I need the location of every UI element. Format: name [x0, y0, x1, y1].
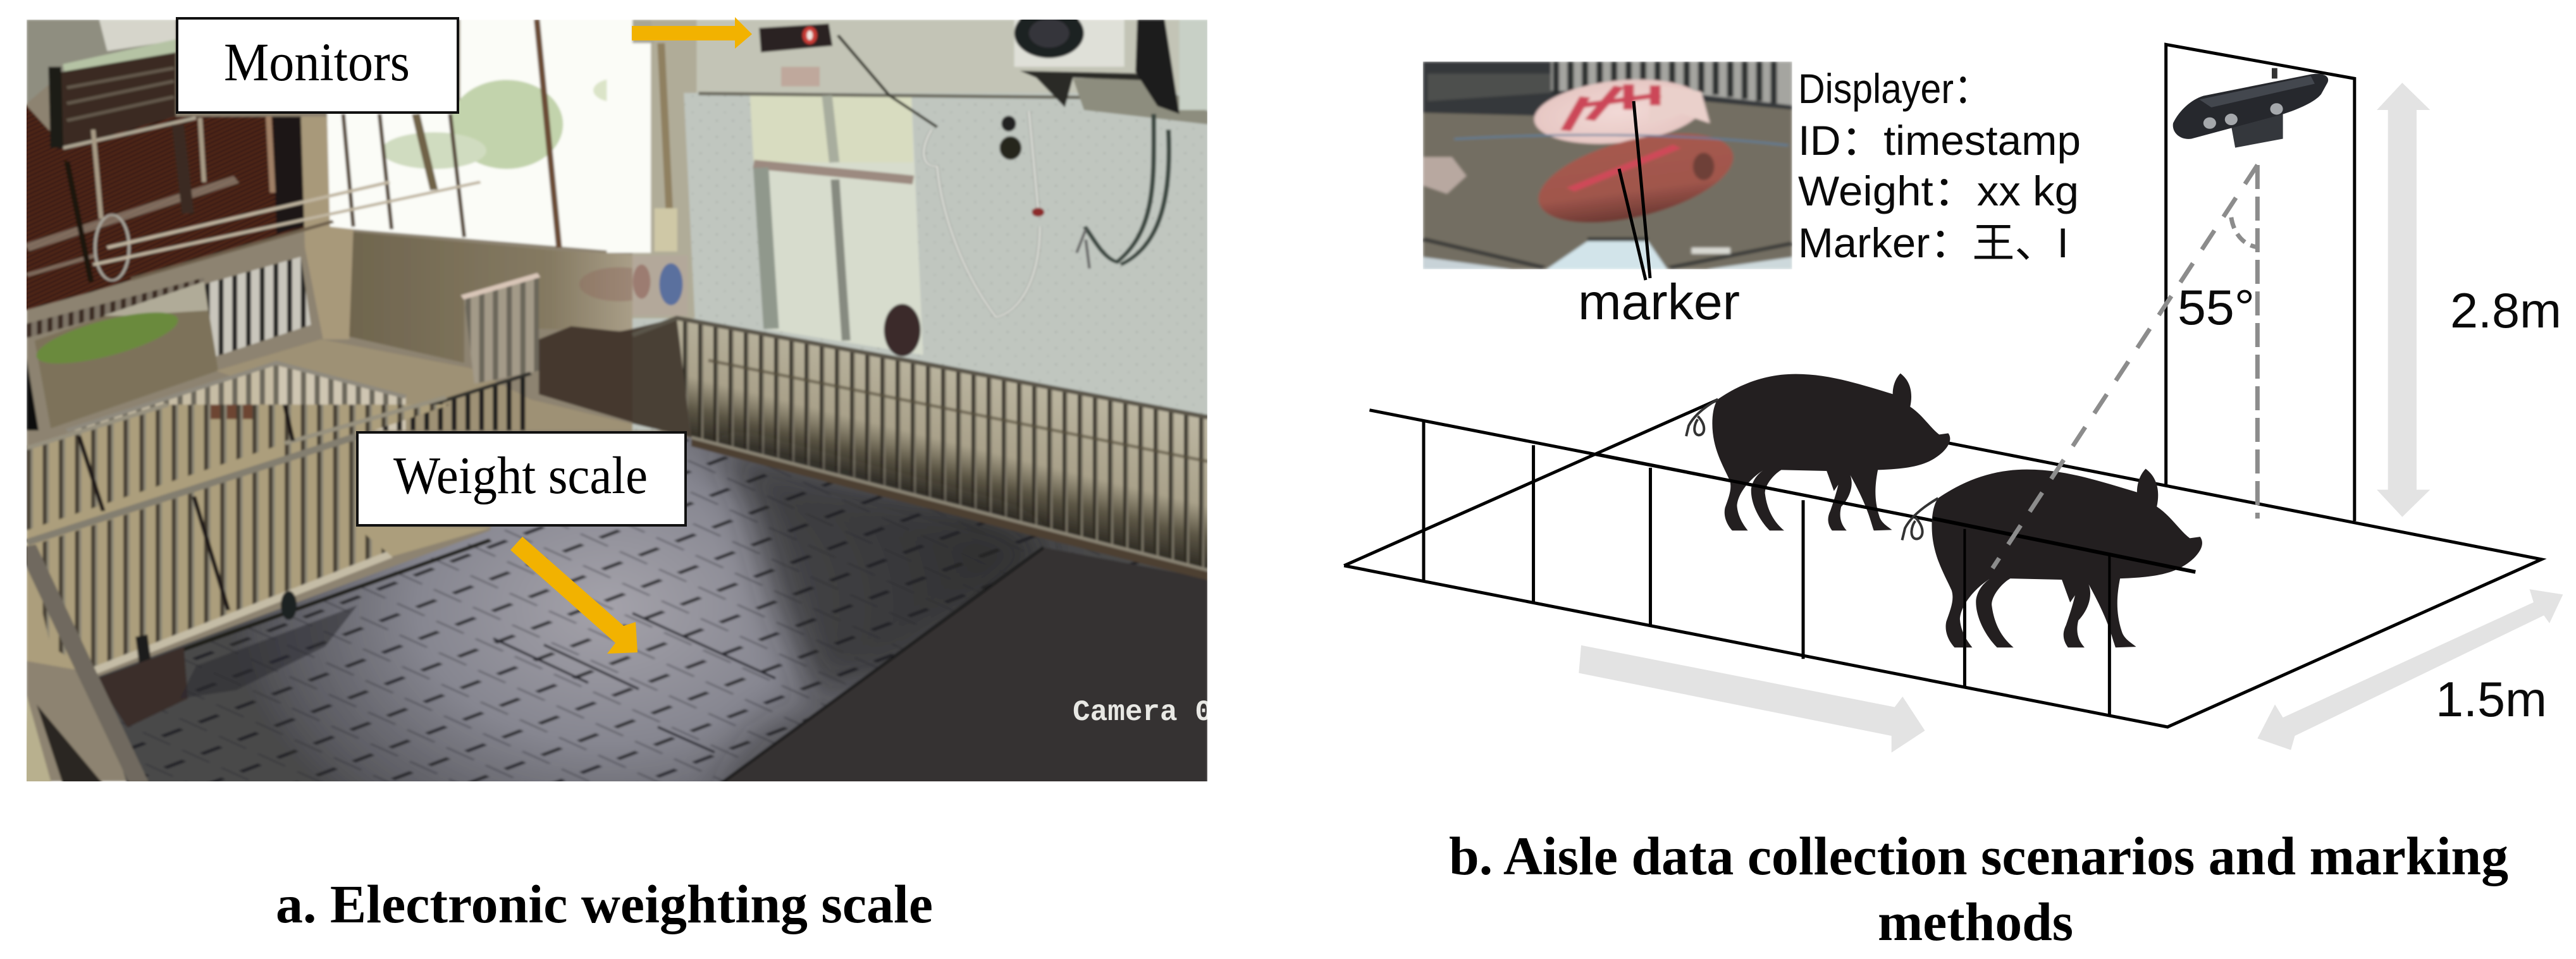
arrow: to monitors [632, 17, 752, 49]
photo: weighing area interior [25, 8, 1208, 797]
label: marker: marker [1578, 274, 1740, 330]
line: Marker: Marker：王、I [1798, 219, 2069, 266]
label: Monitors: Monitors [224, 32, 410, 92]
aisle floor, fence and wall lines [1344, 44, 2541, 727]
camera watermark: Camera 0 [1073, 696, 1212, 729]
arrow: aisle direction [1579, 645, 1925, 753]
arrow: to weight scale [510, 537, 638, 654]
arrow: camera height [2377, 83, 2430, 517]
caption a: a. Electronic weighting scale [276, 874, 933, 934]
icon: back pig silhouette [1686, 374, 1950, 530]
icon: front pig silhouette [1902, 469, 2202, 647]
label: Monitors [177, 18, 458, 113]
label: Weight scale: Weight scale [393, 446, 648, 505]
label: 55 degrees: 55° [2178, 279, 2255, 335]
arrow: aisle width [2257, 589, 2563, 750]
caption b [1449, 826, 2508, 952]
icon: depth camera [2173, 68, 2328, 148]
caption b second line: methods [1878, 891, 2073, 952]
label: Weight scale [357, 432, 686, 525]
line: Weight: Weight：xx kg [1798, 168, 2079, 214]
marker pointer lines [1619, 101, 1650, 280]
right fence wall with stain [677, 318, 1208, 572]
line: Displayer: Displayer： [1798, 65, 1991, 112]
fence rail and posts over front pig [1933, 518, 2195, 715]
tiled floor [95, 436, 1208, 784]
camera field of view: dashed lines and angle arc [1992, 165, 2257, 568]
label: width 1.5m: 1.5m [2436, 671, 2547, 727]
label: height 2.8m: 2.8m [2450, 283, 2561, 338]
panel: aisle scene diagram [1344, 44, 2563, 753]
caption b first line: b. Aisle data collection scenarios and marking [1449, 826, 2508, 886]
inset photo: marked pigs [1423, 61, 1792, 269]
panel: electronic weighing scale photo [25, 8, 1212, 797]
displayer info text [1798, 65, 2081, 266]
line: ID: ID：timestamp [1798, 117, 2081, 164]
front rail over back pig [1599, 455, 1933, 521]
